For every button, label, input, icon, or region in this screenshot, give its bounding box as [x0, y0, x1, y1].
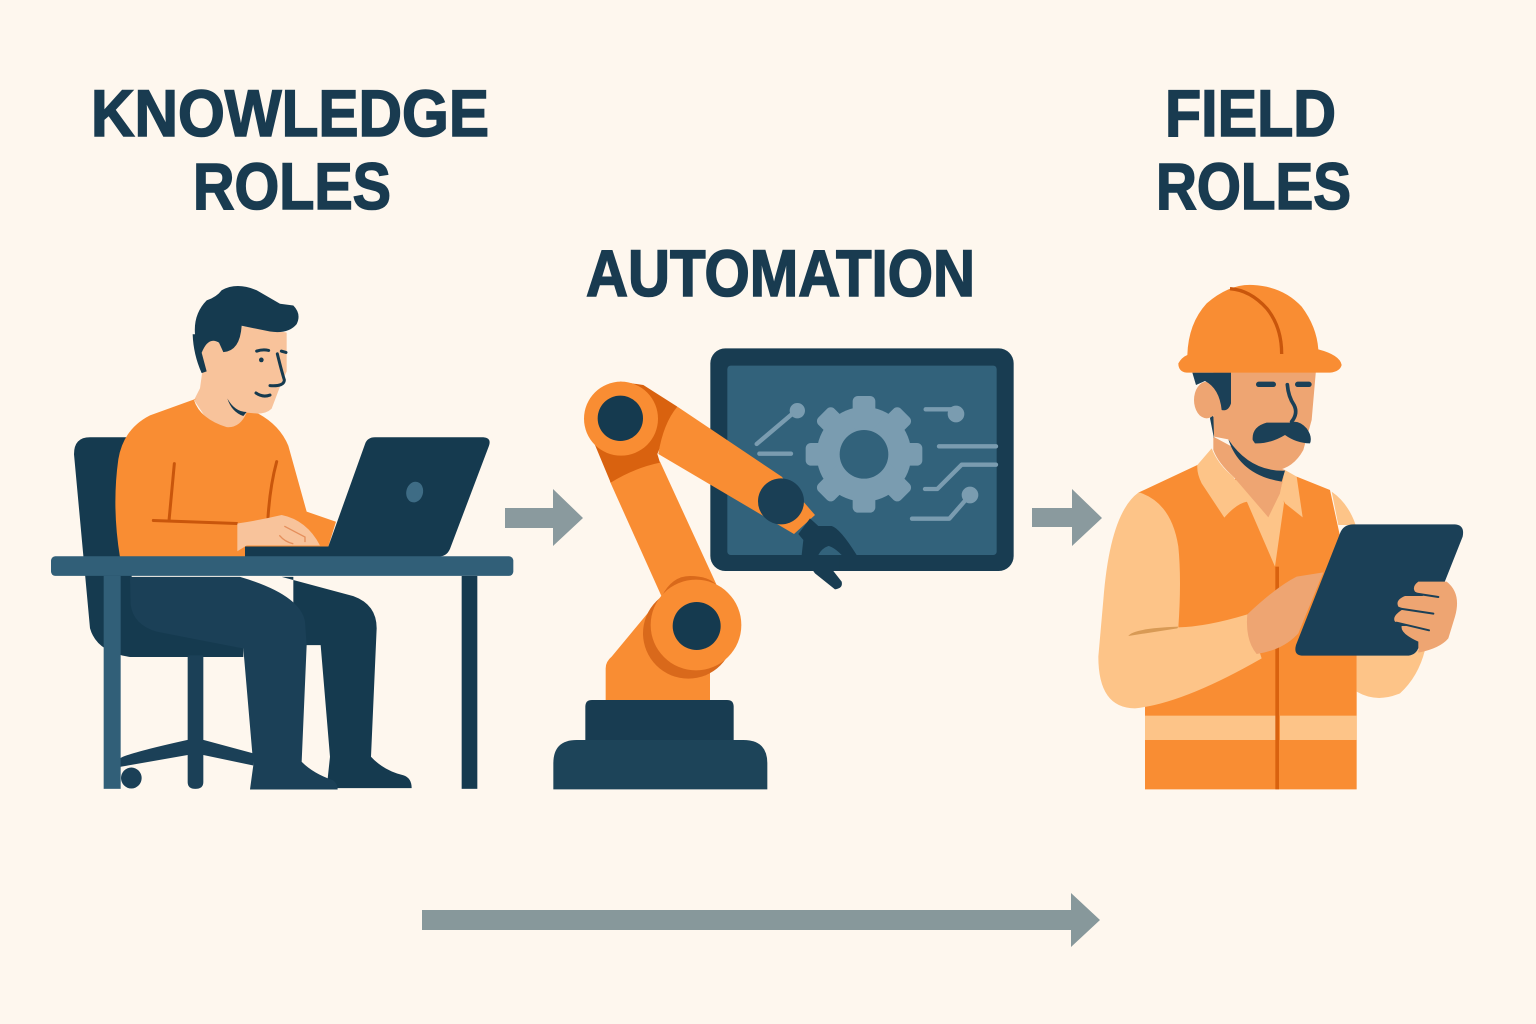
illustration: knowledge worker at desk	[51, 286, 513, 790]
hand on keyboard	[237, 515, 320, 551]
arrow: long bottom shift arrow	[422, 893, 1100, 947]
heading: field roles	[1156, 76, 1351, 223]
circuit traces	[757, 409, 996, 519]
heading: automation: AUTOMATION	[586, 236, 975, 310]
gear icon	[806, 396, 922, 513]
face	[1192, 370, 1316, 482]
trousers	[130, 577, 412, 790]
illustration: robot arm and control screen	[553, 348, 1014, 789]
robot base	[553, 700, 767, 789]
orange sweater	[115, 398, 336, 557]
heading: knowledge roles: KNOWLEDGE	[91, 76, 489, 150]
control screen	[710, 348, 1014, 571]
heading: field roles: FIELD	[1165, 76, 1336, 150]
office chair	[74, 437, 253, 789]
desk	[51, 556, 513, 789]
far sleeve	[1332, 492, 1425, 698]
arrow: automation to field	[1032, 489, 1102, 546]
gripper	[798, 518, 857, 589]
hard hat	[1178, 285, 1342, 373]
heading: knowledge roles	[91, 76, 489, 223]
hi-vis vest	[1138, 465, 1357, 789]
near arm	[1098, 493, 1323, 708]
heading: field roles: ROLES	[1156, 149, 1351, 223]
neck and shirt	[1197, 437, 1303, 567]
laptop	[245, 437, 490, 557]
robot arm	[584, 382, 815, 700]
heading: knowledge roles: ROLES	[193, 149, 391, 223]
illustration: field worker with tablet	[1098, 285, 1463, 789]
tablet	[1295, 524, 1463, 656]
hand holding tablet	[1394, 582, 1457, 653]
arrow: knowledge to automation	[505, 489, 583, 546]
head and neck	[193, 286, 299, 429]
